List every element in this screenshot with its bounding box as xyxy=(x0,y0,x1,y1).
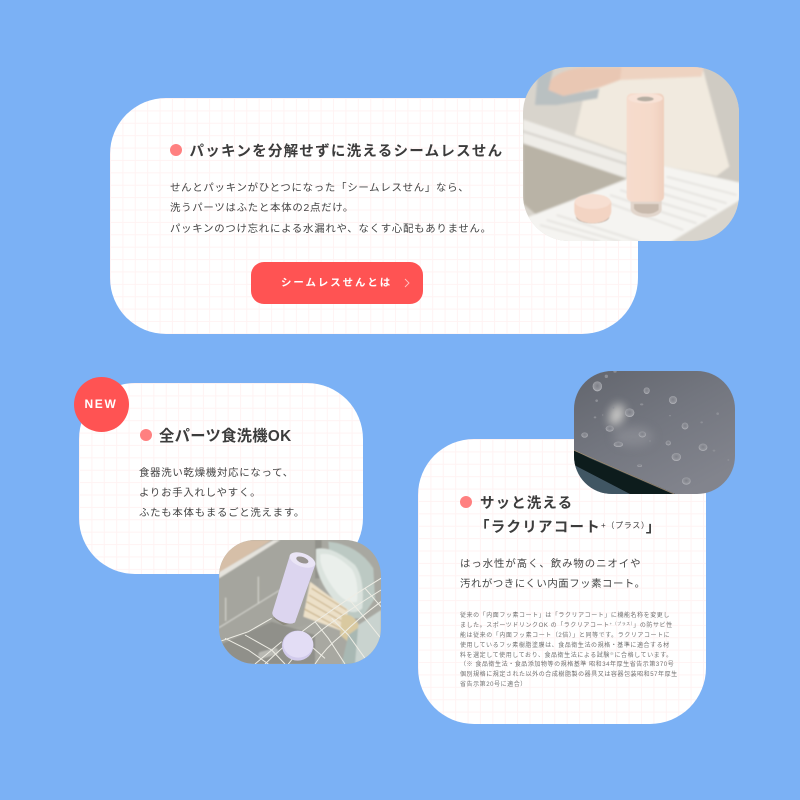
body text: dishwasher safe: 食器洗い乾燥機対応になって、 xyxy=(139,468,294,478)
footnote text: 個別規格に規定された以外の合成樹脂製の器具又は容器包装昭和57年厚生 xyxy=(460,672,678,678)
footnote text: （※ 食品衛生法・食品添加物等の規格基準 昭和34年厚生省告示第370号 xyxy=(460,662,674,668)
heading: rakuclear coat: サッと洗える xyxy=(480,496,573,512)
body text: seamless stopper xyxy=(170,182,492,234)
body text: rakuclear coat: はっ水性が高く、飲み物のニオイや xyxy=(460,558,641,570)
heading dot xyxy=(460,496,472,508)
body text: rakuclear coat xyxy=(460,558,646,590)
photo: lilac bottle in dishwasher xyxy=(219,540,381,664)
heading: rakuclear coat xyxy=(475,495,661,536)
footnote text: ました。スポーツドリンクOK の「ラクリアコート+（プラス）」の防サビ性 xyxy=(460,621,673,629)
panel: rakuclear coat xyxy=(418,439,706,724)
footnote text xyxy=(460,612,678,688)
body text: rakuclear coat: 汚れがつきにくい内面フッ素コート。 xyxy=(460,578,646,590)
heading: rakuclear coat: 「ラクリアコート+（プラス）」 xyxy=(475,520,661,536)
body text: seamless stopper: せんとパッキンがひとつになった「シームレスせん」なら、 xyxy=(170,182,469,194)
heading dot xyxy=(140,429,152,441)
panel: seamless stopper xyxy=(110,98,638,334)
body text: seamless stopper: パッキンのつけ忘れによる水漏れや、なくす心配もありません。 xyxy=(170,224,492,234)
button: about seamless stopper xyxy=(251,262,423,304)
footnote text: 能は従来の「内面フッ素コート（2倍）」と同等です。ラクリアコートに xyxy=(460,633,670,639)
badge: NEW: NEW xyxy=(84,396,118,410)
badge: NEW xyxy=(74,376,128,432)
body text: seamless stopper: 洗うパーツはふたと本体の2点だけ。 xyxy=(170,202,354,214)
footnote text: 従来の「内面フッ素コート」は「ラクリアコート」に機能名称を変更し xyxy=(460,613,670,619)
footnote text: 使用しているフッ素樹脂塗膜は、食品衛生法の規格・基準に適合する材 xyxy=(460,642,670,648)
photo: water droplets on coating xyxy=(574,371,735,494)
button label: シームレスせんとは xyxy=(281,278,392,289)
body text: dishwasher safe: ふたも本体もまるごと洗えます。 xyxy=(139,508,305,518)
footnote text: 省告示第20号に適合） xyxy=(460,682,527,688)
icon: chevron xyxy=(404,278,410,288)
footnote text: 料を選定して使用しており、食品衛生法による試験※に合格しています。 xyxy=(460,650,673,658)
heading: all parts dishwasher: 全パーツ食洗機OK xyxy=(159,428,291,445)
heading: seamless stopper: パッキンを分解せずに洗えるシームレスせん xyxy=(190,144,503,160)
panel: dishwasher safe xyxy=(79,383,363,574)
heading dot xyxy=(170,144,182,156)
body text: dishwasher safe xyxy=(139,467,305,518)
body text: dishwasher safe: よりお手入れしやすく。 xyxy=(139,488,261,498)
photo: pink bottle on sink tray xyxy=(523,67,739,241)
